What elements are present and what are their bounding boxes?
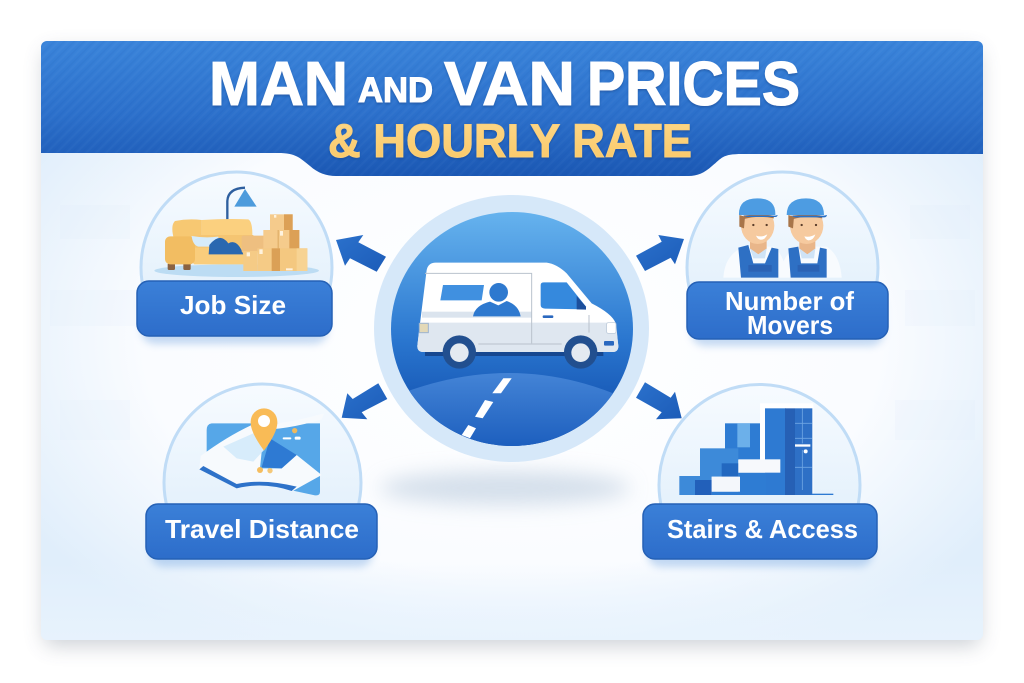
card shadow <box>44 50 980 646</box>
panel: stairs and access <box>643 384 877 586</box>
label: number of movers: Number of <box>725 286 854 316</box>
arrow: to travel distance <box>342 383 387 419</box>
arrow: to job size <box>336 235 386 272</box>
label: stairs and access <box>643 504 877 567</box>
dome <box>658 383 862 504</box>
dome <box>140 170 334 288</box>
road <box>409 373 613 446</box>
icon: sofa, lamp and boxes <box>154 188 319 277</box>
icon: map with pin <box>199 408 324 495</box>
label: number of movers: Movers <box>747 310 833 340</box>
panel: travel distance <box>146 384 377 581</box>
label: number of movers <box>687 282 888 346</box>
arrow: to stairs and access <box>636 382 682 419</box>
centre shadow <box>380 471 630 505</box>
header banner <box>41 41 983 176</box>
title line 2: & HOURLY RATE <box>328 114 692 167</box>
label: job size: Job Size <box>180 290 286 320</box>
icon: two movers <box>723 198 842 278</box>
title line 1 <box>212 60 799 108</box>
label: job size <box>137 281 332 344</box>
arrow: to number of movers <box>636 235 684 271</box>
title line 1: PRICES <box>587 50 800 119</box>
label: travel distance: Travel Distance <box>165 514 359 544</box>
title line 1: MAN <box>209 50 348 119</box>
label: travel distance <box>146 504 377 567</box>
panel: number of movers <box>687 172 888 363</box>
van <box>417 263 618 369</box>
title line 1: AND <box>358 71 433 110</box>
label: stairs and access: Stairs & Access <box>667 514 858 544</box>
title line 1: VAN <box>444 50 575 119</box>
panel: job size <box>137 172 332 363</box>
icon: stairs and door <box>679 403 833 495</box>
dome <box>686 170 880 288</box>
centre van medallion <box>374 195 649 462</box>
dome <box>162 382 362 504</box>
